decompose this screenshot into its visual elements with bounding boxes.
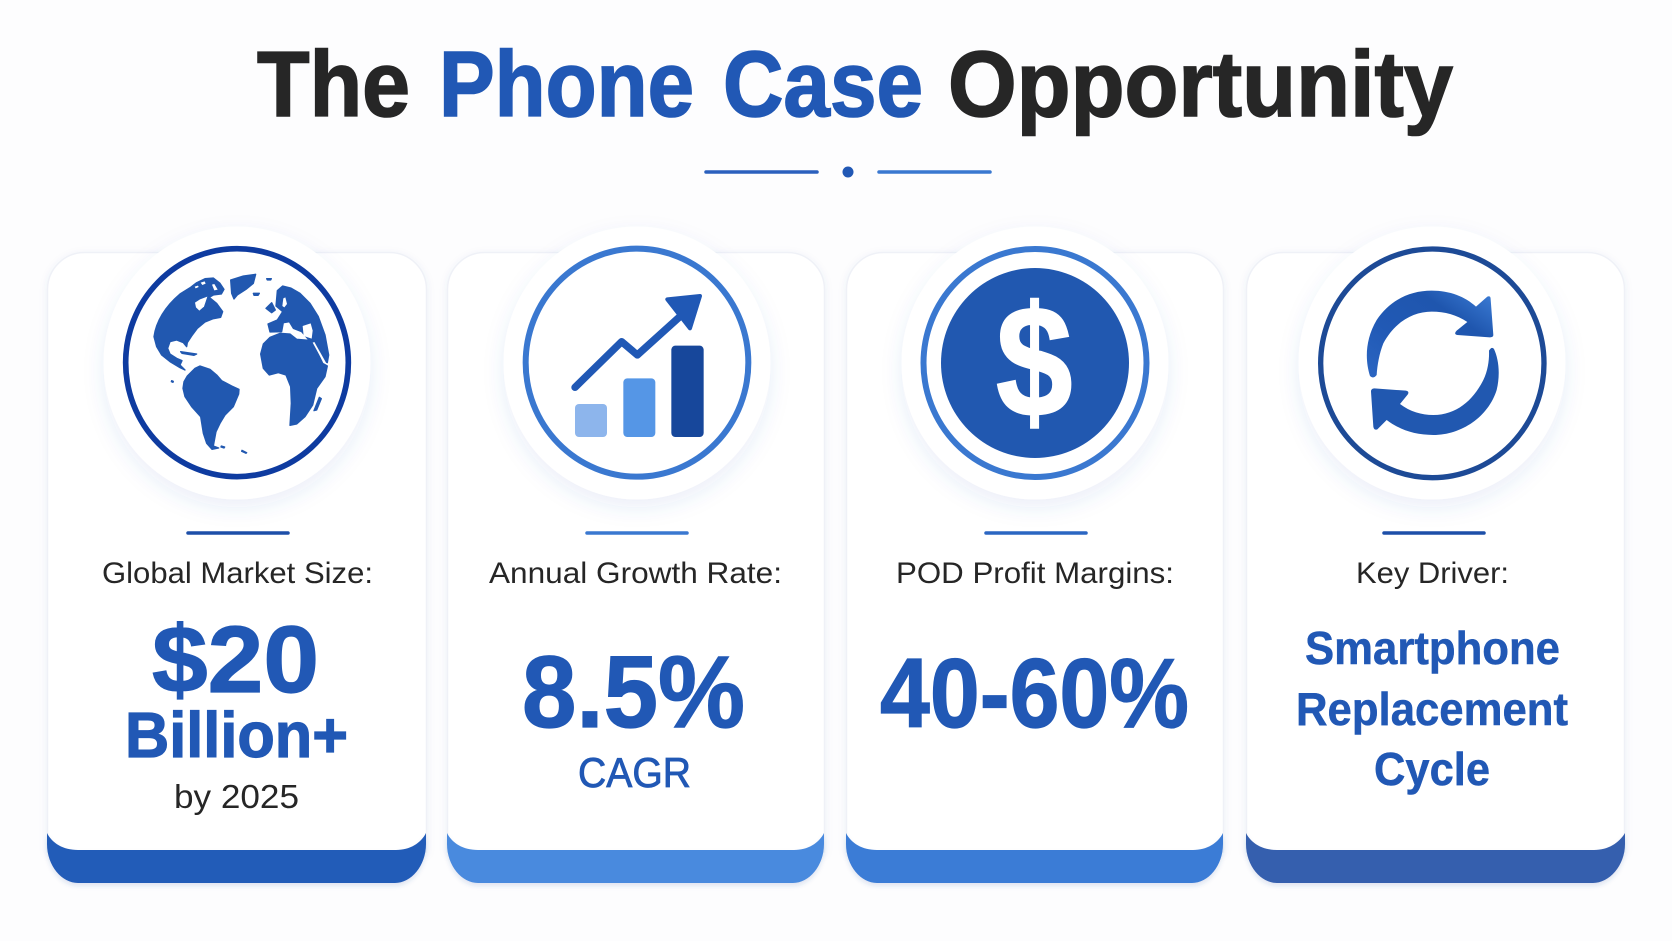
panel: global market size [47, 226, 426, 883]
title: Opportunity [948, 32, 1453, 136]
panel: POD profit margins [846, 226, 1224, 883]
icon: globe [126, 249, 348, 477]
card accent band [1246, 833, 1625, 883]
label: POD Profit Margins: [896, 557, 1174, 590]
value: Replacement [1296, 683, 1568, 735]
title: The [257, 32, 410, 136]
icon badge [1298, 226, 1566, 500]
label: Key Driver: [1356, 557, 1509, 590]
card background [1246, 252, 1624, 852]
heading rule [587, 531, 687, 535]
heading rule [1384, 531, 1484, 535]
title [257, 32, 1453, 136]
value: Billion+ [125, 699, 348, 771]
label: Annual Growth Rate: [489, 557, 782, 590]
value: Cycle [1374, 743, 1490, 795]
card background [48, 252, 426, 852]
heading rule [188, 531, 288, 535]
icon: growth chart [526, 249, 748, 477]
card background [448, 252, 825, 852]
card background [846, 252, 1224, 852]
card accent band [47, 833, 426, 883]
panel: key driver [1246, 226, 1625, 883]
value: 40-60% [880, 638, 1189, 748]
value [125, 607, 348, 771]
icon: dollar coin [924, 249, 1146, 477]
value [1296, 622, 1568, 795]
icon badge [104, 226, 370, 500]
icon badge [504, 226, 770, 500]
panel: annual growth rate [447, 226, 825, 883]
value: Smartphone [1305, 622, 1560, 674]
title divider [706, 166, 990, 178]
card accent band [447, 833, 824, 883]
title: Case [723, 32, 923, 136]
heading rule [986, 531, 1086, 535]
label: Global Market Size: [102, 557, 373, 590]
value note: CAGR [578, 749, 691, 796]
value note: by 2025 [174, 778, 299, 815]
card accent band [846, 833, 1223, 883]
icon: dollar coin: $ [996, 274, 1072, 450]
title: Phone [439, 32, 694, 136]
icon badge [902, 226, 1168, 500]
value: $20 [152, 607, 319, 713]
icon: replacement cycle arrows [1321, 249, 1544, 478]
value: 8.5% [522, 635, 745, 749]
